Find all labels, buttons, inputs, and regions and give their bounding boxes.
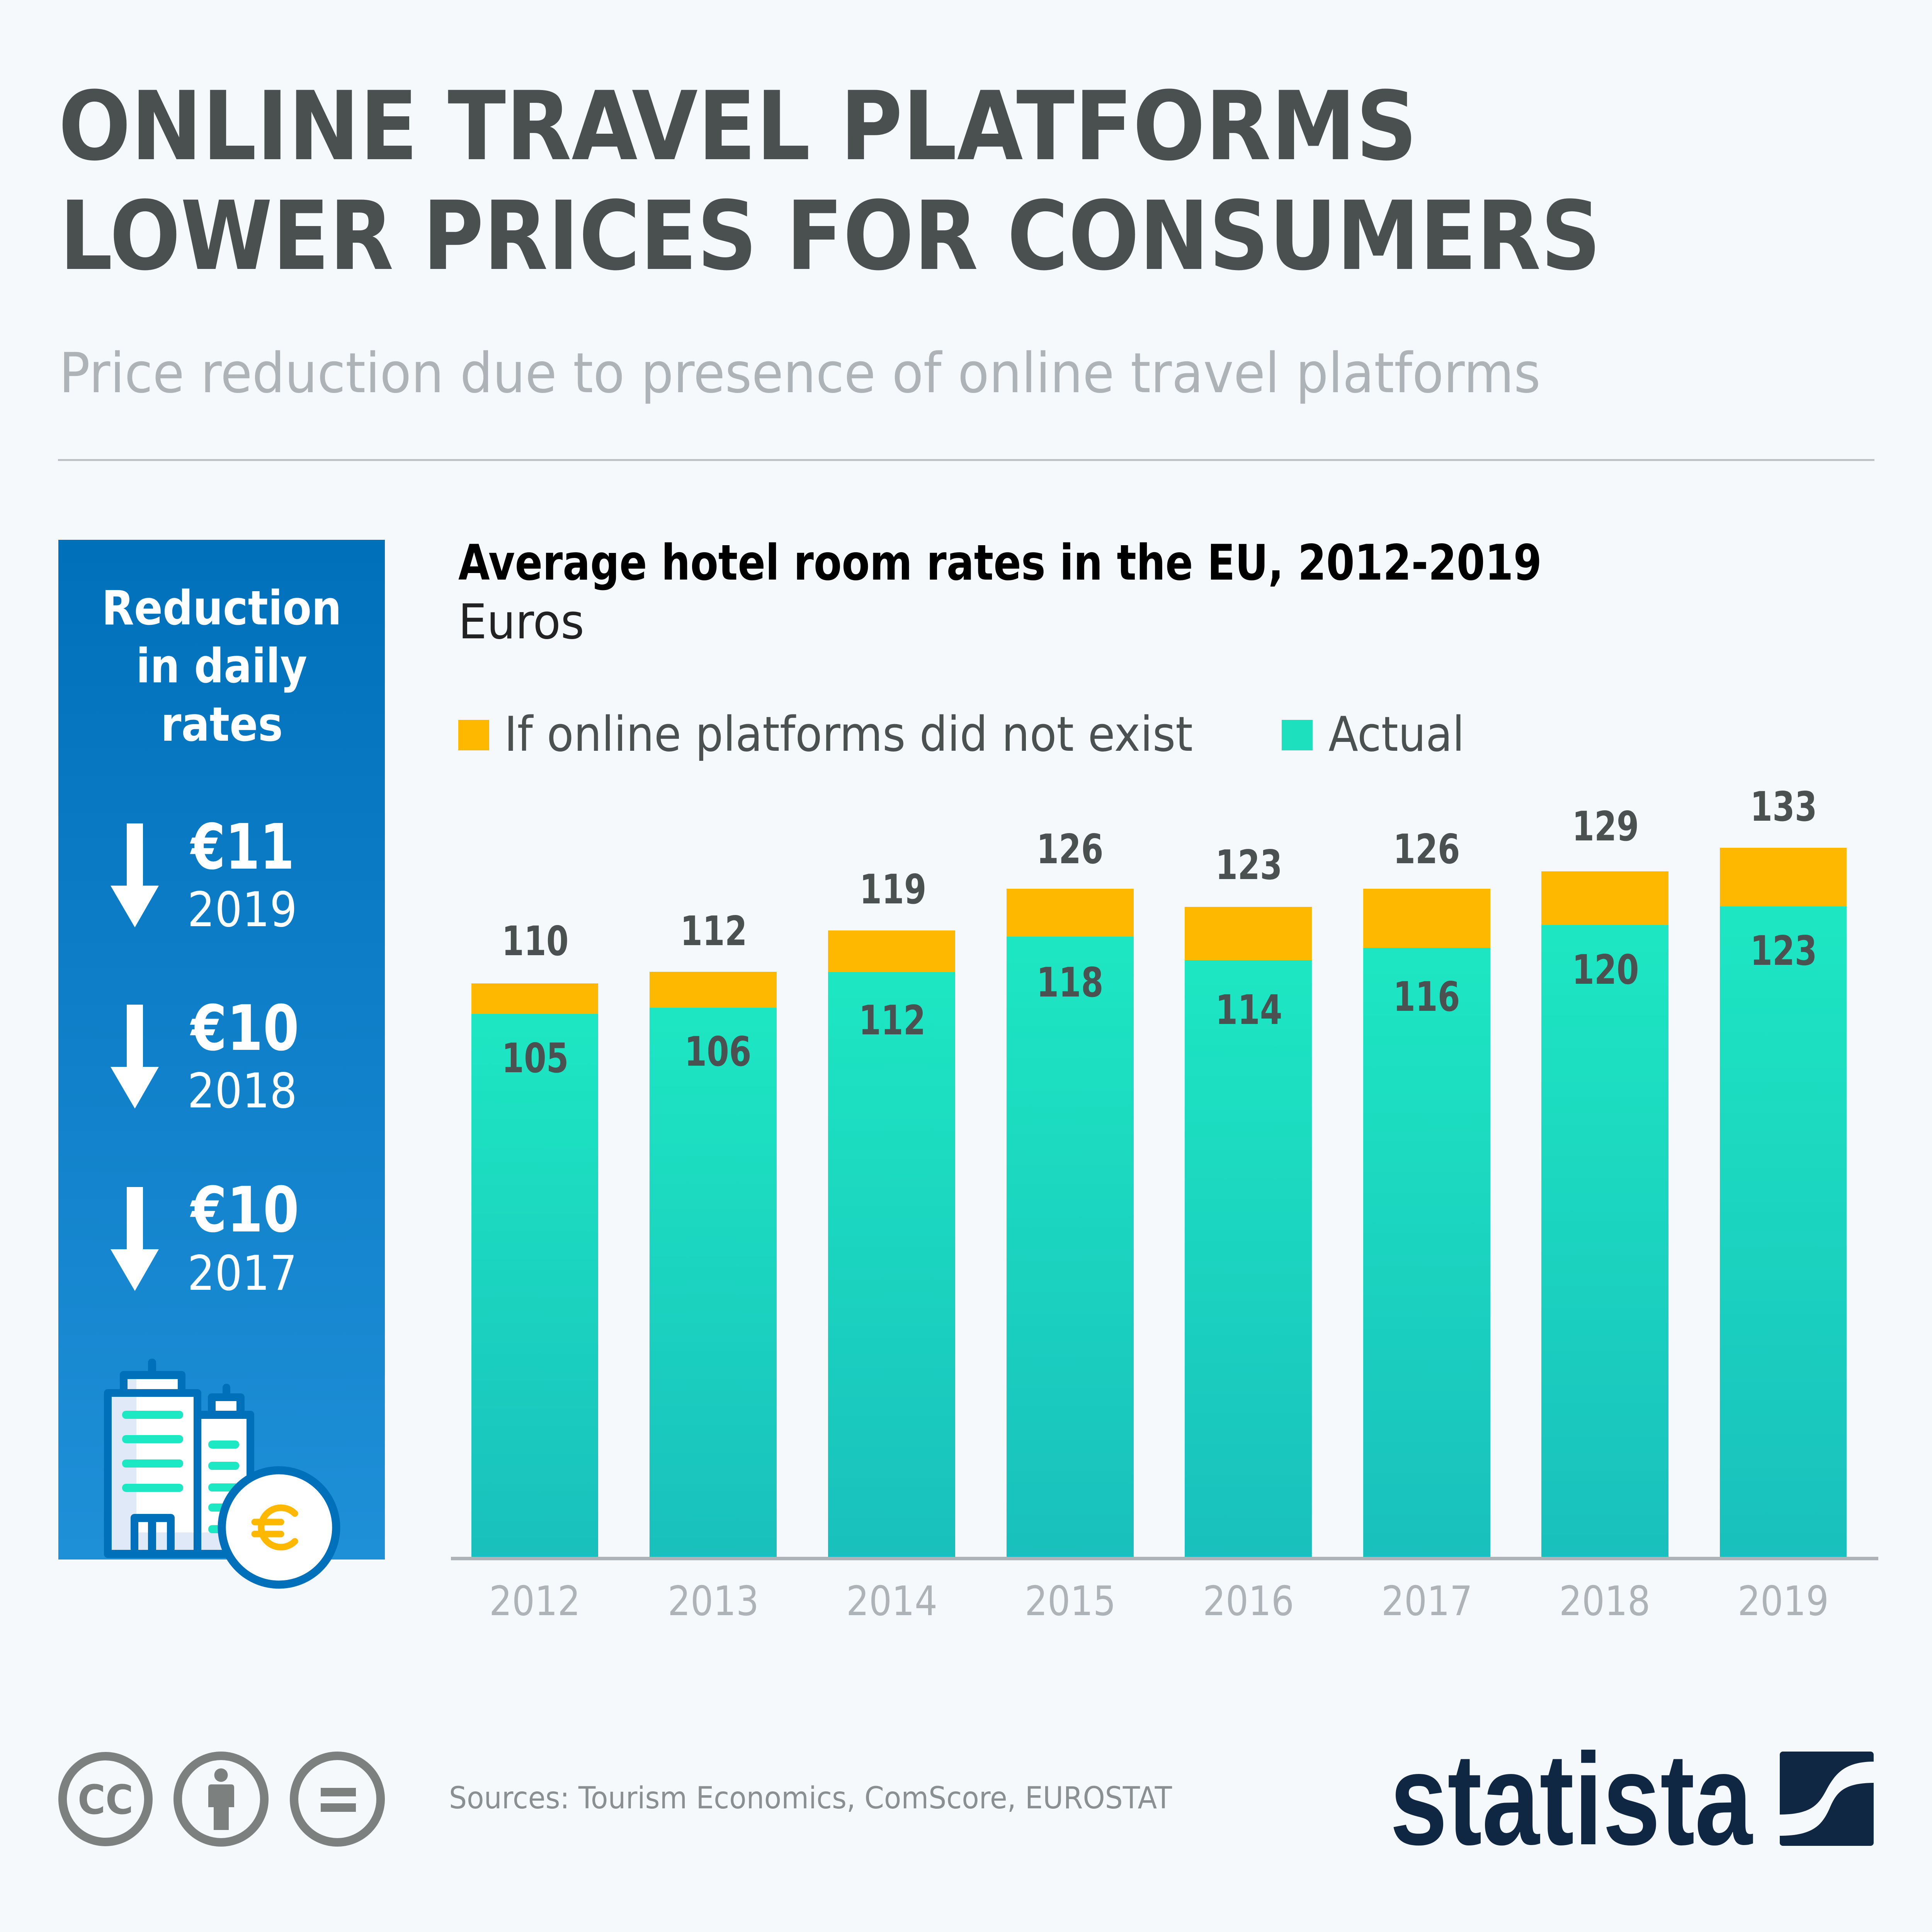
panel heading: Reduction bbox=[102, 581, 342, 636]
stacked bar chart bbox=[451, 783, 1878, 1625]
total value labels: 112 bbox=[680, 908, 747, 955]
icon: no derivatives bbox=[294, 1756, 381, 1842]
title: LOWER PRICES FOR CONSUMERS bbox=[60, 181, 1601, 292]
panel heading: in daily bbox=[136, 639, 307, 694]
total value labels: 126 bbox=[1393, 826, 1460, 873]
actual value labels: 114 bbox=[1216, 986, 1282, 1034]
bar 2016 bbox=[1185, 907, 1312, 1557]
legend: If online platforms did not exist bbox=[504, 707, 1193, 762]
actual value labels bbox=[502, 927, 1817, 1082]
title bbox=[58, 71, 1601, 292]
year labels: 2017 bbox=[1381, 1578, 1473, 1625]
panel heading: rates bbox=[161, 697, 283, 752]
year labels: 2012 bbox=[489, 1578, 580, 1625]
reduction item 2018: €10 bbox=[190, 992, 299, 1065]
year labels bbox=[489, 1578, 1829, 1625]
source: Sources: Tourism Economics, ComScore, EUROSTAT bbox=[449, 1781, 1172, 1816]
year labels: 2016 bbox=[1203, 1578, 1294, 1625]
year labels: 2014 bbox=[846, 1578, 937, 1625]
chart unit: Euros bbox=[458, 594, 584, 650]
bar 2015 bbox=[1007, 889, 1134, 1557]
actual value labels: 120 bbox=[1572, 946, 1639, 993]
bar 2012 bbox=[471, 983, 598, 1557]
actual value labels: 123 bbox=[1750, 927, 1817, 975]
bar 2017 bbox=[1363, 889, 1490, 1557]
reduction item 2019: 2019 bbox=[187, 882, 297, 938]
panel heading bbox=[102, 581, 342, 752]
total value labels: 123 bbox=[1216, 842, 1282, 889]
icon: creative commons: CC bbox=[78, 1776, 133, 1823]
total value labels: 129 bbox=[1572, 803, 1639, 850]
actual value labels: 116 bbox=[1393, 973, 1460, 1020]
total value labels: 110 bbox=[502, 918, 569, 965]
year labels: 2018 bbox=[1559, 1578, 1650, 1625]
actual value labels: 106 bbox=[685, 1028, 751, 1075]
icon: creative commons bbox=[63, 1756, 148, 1842]
reduction item 2019: €11 bbox=[190, 811, 294, 884]
statista wordmark: statista bbox=[1390, 1726, 1753, 1872]
actual value labels: 112 bbox=[859, 997, 926, 1044]
year labels: 2019 bbox=[1738, 1578, 1829, 1625]
legend: Actual bbox=[1328, 707, 1464, 762]
reduction item 2018 bbox=[111, 992, 299, 1119]
total value labels: 133 bbox=[1750, 783, 1817, 830]
reduction item 2017: 2017 bbox=[187, 1246, 297, 1301]
statista logo mark bbox=[1779, 1752, 1874, 1846]
x axis bbox=[451, 1557, 1878, 1560]
actual value labels: 105 bbox=[502, 1035, 569, 1082]
total value labels: 126 bbox=[1036, 826, 1104, 873]
icon: hotel buildings with euro coin bbox=[104, 1359, 336, 1585]
subtitle: Price reduction due to presence of online travel platforms bbox=[59, 341, 1541, 405]
bar 2018 bbox=[1541, 871, 1668, 1557]
year labels: 2013 bbox=[668, 1578, 759, 1625]
total value labels bbox=[502, 783, 1817, 965]
actual value labels: 118 bbox=[1036, 959, 1104, 1006]
bar 2013 bbox=[650, 972, 777, 1557]
icon: attribution bbox=[178, 1756, 264, 1842]
reduction item 2017: €10 bbox=[190, 1174, 299, 1247]
year labels: 2015 bbox=[1025, 1578, 1116, 1625]
total value labels: 119 bbox=[859, 866, 927, 913]
bar 2014 bbox=[828, 930, 955, 1557]
reduction item 2017 bbox=[111, 1174, 299, 1301]
chart title: Average hotel room rates in the EU, 2012-2019 bbox=[458, 534, 1542, 591]
reduction item 2019 bbox=[111, 811, 297, 938]
panel: reduction in daily rates bbox=[58, 540, 385, 1585]
reduction item 2018: 2018 bbox=[187, 1063, 297, 1119]
bar 2019 bbox=[1720, 848, 1847, 1557]
title: ONLINE TRAVEL PLATFORMS bbox=[58, 71, 1417, 182]
